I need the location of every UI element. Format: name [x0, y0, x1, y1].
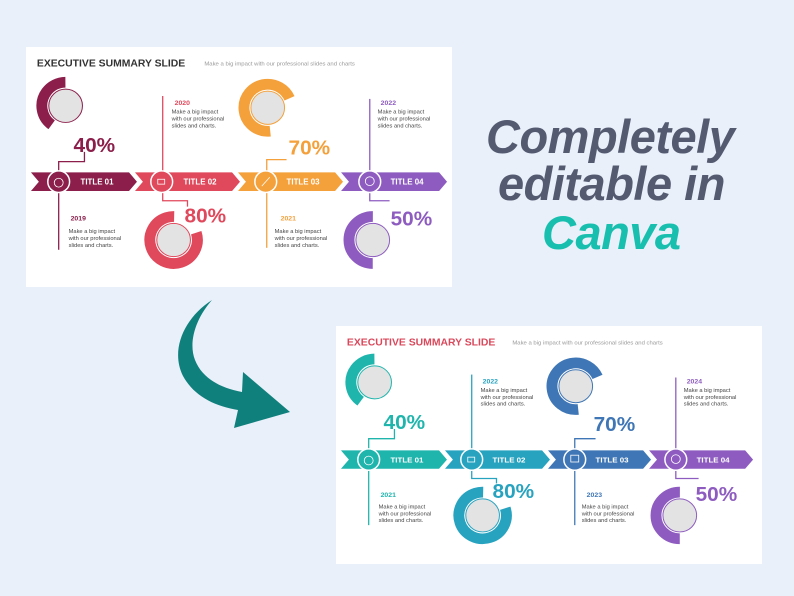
- heading: Make a big impact with our professional slides and charts: [512, 340, 663, 346]
- year texts: 2023: [587, 492, 602, 499]
- percentages: 70%: [289, 137, 330, 160]
- percentages: [74, 134, 432, 230]
- heading: Make a big impact with our professional slides and charts: [204, 62, 355, 68]
- slide 1: maroon/red/orange/purple: [26, 47, 452, 287]
- year texts: slides and charts.: [172, 123, 217, 129]
- year texts: Make a big impact: [481, 388, 528, 394]
- year texts: with our professional: [378, 511, 431, 517]
- year texts: slides and charts.: [378, 123, 423, 129]
- year texts: 2020: [175, 100, 190, 107]
- connector lines: [59, 96, 390, 250]
- percentages: 50%: [391, 207, 432, 230]
- year texts: slides and charts.: [69, 243, 114, 249]
- year texts: slides and charts.: [582, 518, 627, 524]
- timeline arrows: TITLE 04: [697, 456, 730, 464]
- year texts: slides and charts.: [481, 402, 526, 408]
- year texts: [68, 100, 430, 249]
- timeline arrows: TITLE 02: [184, 178, 217, 187]
- year texts: with our professional: [68, 236, 121, 242]
- year texts: Make a big impact: [684, 388, 731, 394]
- year texts: 2022: [381, 100, 396, 107]
- year texts: Make a big impact: [172, 110, 219, 116]
- percentages: 50%: [696, 483, 737, 506]
- heading: EXECUTIVE SUMMARY SLIDE: [347, 338, 496, 348]
- donuts: [341, 350, 704, 545]
- heading: EXECUTIVE SUMMARY SLIDE: [37, 59, 185, 70]
- timeline arrows: [31, 171, 447, 192]
- percentages: 40%: [74, 134, 115, 157]
- year texts: with our professional: [377, 116, 430, 122]
- year texts: with our professional: [683, 395, 736, 401]
- timeline arrows: TITLE 02: [493, 456, 526, 464]
- year texts: 2021: [281, 215, 296, 222]
- slide 2: teal/blue/purple: [336, 326, 762, 564]
- timeline arrows: TITLE 01: [390, 456, 424, 464]
- percentages: 80%: [493, 480, 534, 503]
- year texts: 2022: [483, 378, 498, 385]
- year texts: with our professional: [480, 395, 533, 401]
- year texts: Make a big impact: [275, 229, 322, 235]
- year texts: 2021: [381, 492, 396, 499]
- year texts: Make a big impact: [378, 110, 425, 116]
- timeline arrows: TITLE 03: [596, 456, 629, 464]
- headline text: Completely: [486, 110, 734, 163]
- percentages: 70%: [594, 413, 635, 436]
- percentages: [384, 411, 737, 506]
- year texts: slides and charts.: [275, 243, 320, 249]
- year texts: slides and charts.: [684, 402, 729, 408]
- year texts: with our professional: [171, 116, 224, 122]
- heading: [37, 59, 355, 70]
- headline text: Canva: [542, 206, 681, 259]
- donuts: [32, 73, 397, 270]
- timeline arrows: TITLE 04: [391, 178, 424, 187]
- timeline arrows: TITLE 03: [287, 178, 320, 187]
- percentages: 40%: [384, 411, 425, 434]
- year texts: Make a big impact: [379, 505, 426, 511]
- headline text: [486, 110, 737, 259]
- year texts: with our professional: [581, 511, 634, 517]
- year texts: slides and charts.: [379, 518, 424, 524]
- year texts: Make a big impact: [582, 505, 629, 511]
- heading: [347, 338, 663, 348]
- connector lines: [369, 375, 699, 525]
- year texts: with our professional: [274, 236, 327, 242]
- year texts: 2019: [71, 215, 86, 222]
- year texts: [378, 378, 736, 524]
- year texts: 2024: [687, 378, 702, 385]
- percentages: 80%: [185, 204, 226, 227]
- headline text: editable in: [498, 157, 725, 210]
- year texts: Make a big impact: [69, 229, 116, 235]
- timeline arrows: TITLE 01: [80, 178, 114, 187]
- timeline arrows: [341, 449, 753, 470]
